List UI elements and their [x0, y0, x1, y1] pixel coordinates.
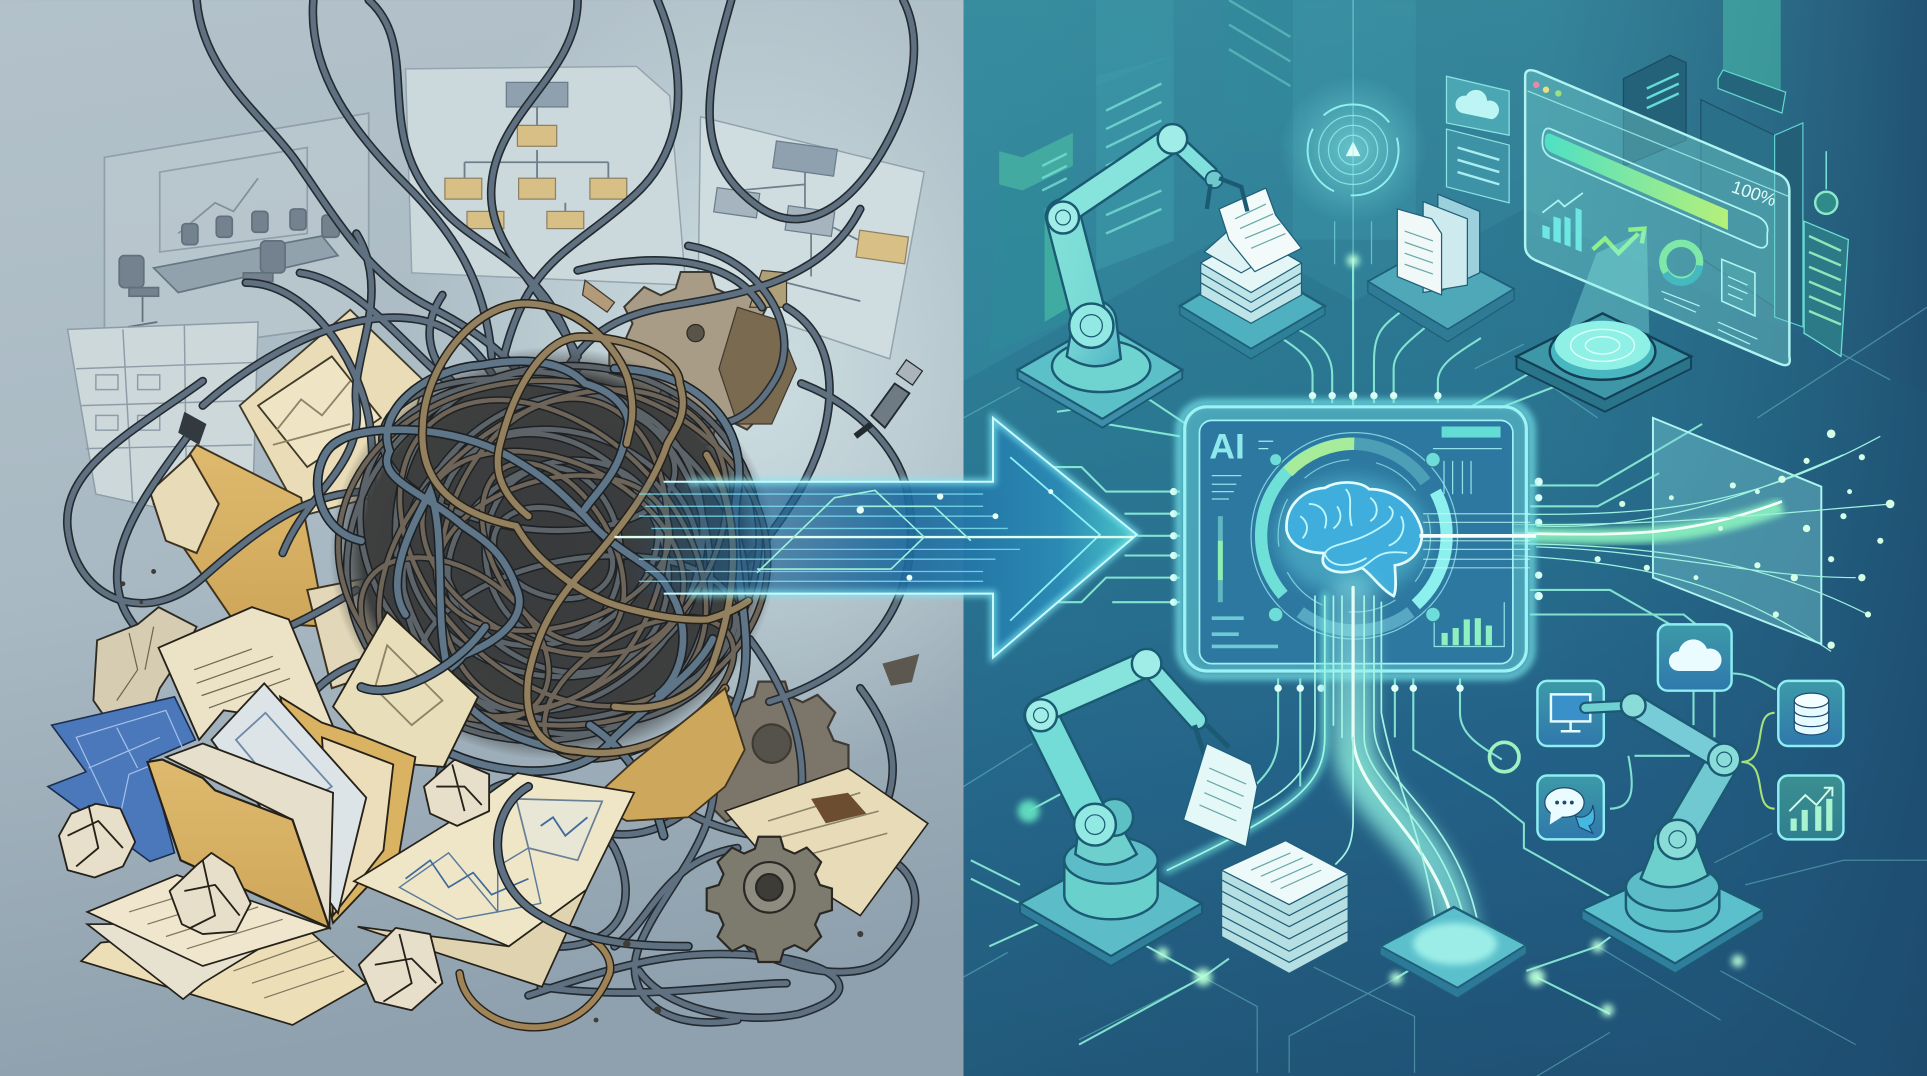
light beam to output — [1438, 436, 1893, 651]
circuit traces — [971, 258, 1776, 1045]
robot arm: bottom right — [1582, 705, 1764, 973]
icon: cloud tile — [1658, 624, 1732, 691]
paper held by lower robot — [1183, 744, 1257, 847]
downward light stream — [1168, 587, 1481, 940]
icon: chat tile — [1537, 775, 1604, 839]
gear: rusty gear right — [695, 682, 848, 835]
panel: automated AI side background — [964, 0, 1927, 1076]
beam lines from brain — [1423, 514, 1530, 568]
outer cables — [67, 0, 915, 1022]
robot gripper over monitor — [1585, 693, 1646, 718]
clipboard — [1722, 259, 1755, 316]
papers: upper pile — [240, 310, 424, 516]
gear: rusty gear upper right — [583, 270, 796, 445]
top right indicator — [1442, 426, 1501, 438]
mini bars — [1542, 208, 1582, 252]
AI label: AI — [1209, 426, 1245, 466]
platform: light receiver — [1380, 907, 1526, 998]
left panel readouts — [1258, 441, 1273, 449]
paper held by robot — [1219, 188, 1301, 272]
papers: lower left pile — [81, 875, 366, 1025]
icon: database tile — [1778, 681, 1843, 746]
panel: AI core — [1180, 403, 1536, 676]
sketch: meeting room — [104, 113, 369, 359]
hologram beam — [1567, 230, 1649, 333]
paper: torn gold sheet in tangle — [590, 688, 745, 821]
crumpled paper: behind blueprint — [93, 607, 197, 725]
gauge rings — [1251, 433, 1458, 639]
mini bar chart — [1434, 602, 1504, 646]
screen: isometric dashboard — [1525, 70, 1790, 365]
progress bar — [1542, 128, 1768, 248]
cable plug: left connector — [178, 412, 206, 445]
icon: monitor tile — [1537, 681, 1604, 746]
transformation arrow — [614, 418, 1137, 658]
document stack top — [1180, 221, 1325, 359]
data particles — [1595, 430, 1894, 649]
papers: chart sheets — [354, 773, 634, 987]
output screen — [1653, 418, 1821, 644]
sketch: process flow paper — [698, 117, 924, 359]
robot arm: bottom left — [1020, 649, 1229, 966]
icon: brain — [1276, 477, 1428, 596]
icon: growth chart tile — [1778, 775, 1843, 839]
gear: gray gear lower — [707, 837, 832, 962]
sketch: org chart paper — [406, 66, 686, 285]
icon: cloud card — [1446, 76, 1509, 135]
rust stains — [811, 654, 919, 823]
folder: upper yellow folder — [150, 445, 406, 688]
crumpled paper balls — [59, 760, 489, 1010]
label: 100% — [1729, 177, 1779, 210]
right side: wall and floor shading — [964, 209, 1927, 1076]
circuit nodes — [1018, 254, 1744, 1016]
cable tangle ball — [294, 304, 812, 836]
folder: large gold folder — [147, 760, 329, 928]
panel: chaotic legacy side background — [0, 0, 1094, 1076]
ring node — [1489, 742, 1519, 772]
scattered scraps — [120, 569, 863, 1023]
documents binder top — [1368, 194, 1514, 342]
blueprint sheet — [48, 697, 195, 862]
right side: circuit floor grid — [964, 307, 1927, 1076]
right side: data center towers — [989, 0, 1848, 356]
document stack bottom — [1222, 841, 1348, 973]
papers: right sheet — [725, 768, 928, 916]
papers: middle fan — [159, 607, 478, 928]
donut — [1663, 243, 1700, 280]
icon: list card — [1446, 129, 1509, 203]
platform: hologram base — [1517, 313, 1691, 412]
robot arm: top left — [1018, 124, 1247, 428]
arrow data streams — [614, 490, 1133, 581]
foreground cables over papers — [361, 627, 688, 1027]
cable plug: USB connector — [855, 360, 922, 436]
port dots — [1170, 392, 1543, 692]
icon: radar target — [1279, 0, 1427, 283]
arrow up — [1593, 229, 1644, 253]
sketch: calendar paper — [68, 322, 258, 528]
